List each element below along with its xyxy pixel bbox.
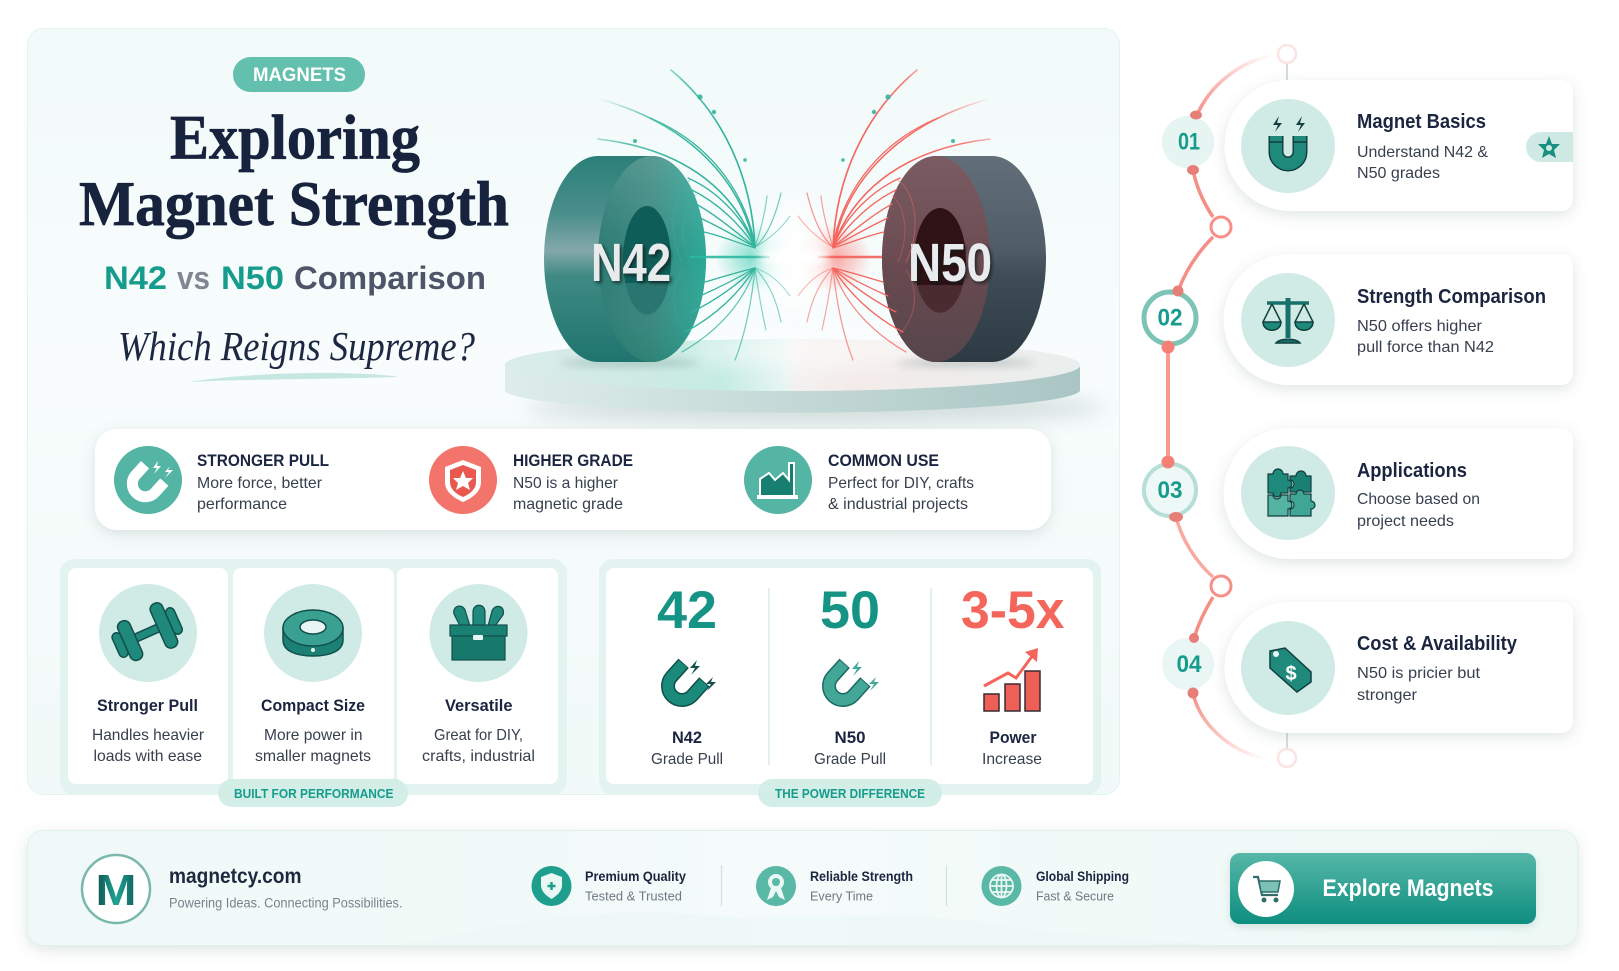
feature: stronger pull: More force, better xyxy=(197,475,323,492)
feature: higher grade: magnetic grade xyxy=(513,496,623,513)
feature: stronger pull: STRONGER PULL xyxy=(197,452,329,470)
badge: built for performance xyxy=(218,779,408,807)
card: versatile: Versatile xyxy=(445,696,512,715)
step card: Magnet Basics xyxy=(1224,80,1573,211)
card: versatile: Great for DIY, xyxy=(434,727,523,744)
magnetic field lines: teal xyxy=(592,70,790,360)
card: stronger pull: Handles heavier xyxy=(92,727,205,744)
icon: dumbbell xyxy=(106,597,188,669)
step card: Strength Comparison: pull force than N42 xyxy=(1357,339,1494,356)
timeline marker 01: 01 xyxy=(1178,128,1200,156)
footer bar xyxy=(28,830,1578,946)
badge: the power difference xyxy=(758,779,942,807)
stat: N50: Grade Pull xyxy=(814,751,886,768)
star tab xyxy=(1526,132,1573,162)
step card: Magnet Basics: N50 grades xyxy=(1357,165,1440,182)
logo: M xyxy=(96,866,136,915)
stat: N50: 50 xyxy=(820,581,880,640)
stat: N50: N50 xyxy=(834,728,866,747)
stat: N42: 42 xyxy=(657,581,717,640)
step card: Cost & Availability xyxy=(1224,602,1573,733)
step card: Strength Comparison: N50 offers higher xyxy=(1357,318,1483,335)
icon: puzzle pieces xyxy=(1268,469,1315,516)
step card: Applications xyxy=(1224,428,1573,559)
feature bar xyxy=(95,429,1051,530)
magnetic field lines: red xyxy=(798,70,996,360)
timeline marker 03 xyxy=(1144,456,1196,522)
feature: higher grade: HIGHER GRADE xyxy=(513,452,633,470)
card: compact size: smaller magnets xyxy=(255,748,371,765)
icon: balance scale xyxy=(1263,298,1313,343)
icon: horseshoe magnet xyxy=(1269,116,1307,164)
brand text: magnetcy.com xyxy=(169,865,302,888)
timeline marker 02: 02 xyxy=(1158,304,1182,332)
step card: Applications: Choose based on xyxy=(1357,491,1480,508)
subtitle: N42 vs N50 Comparison: Comparison xyxy=(294,260,486,296)
panel: main hero panel xyxy=(28,28,1120,807)
trust badge: premium quality: Tested & Trusted xyxy=(585,888,682,904)
magnet N50 xyxy=(882,156,1046,367)
subtitle: N42 vs N50 Comparison: N50 xyxy=(221,260,284,296)
feature: common use: & industrial projects xyxy=(828,496,968,513)
trust badge: premium quality: Premium Quality xyxy=(585,869,686,884)
trust badge: global shipping xyxy=(982,866,1129,906)
timeline marker 04: 04 xyxy=(1176,651,1202,678)
badge: built for performance: BUILT FOR PERFORMANCE xyxy=(234,786,394,801)
step card: Strength Comparison: Strength Comparison xyxy=(1357,286,1546,308)
icon: ring magnet xyxy=(283,610,343,656)
stat: N50 xyxy=(814,581,886,768)
subtitle: N42 vs N50 Comparison: vs xyxy=(177,260,210,296)
card: stronger pull: loads with ease xyxy=(94,748,202,765)
panel: built for performance xyxy=(60,559,567,807)
stat: N42 xyxy=(651,581,723,768)
feature: stronger pull xyxy=(114,446,329,514)
magnet N42: N42 xyxy=(591,233,671,293)
trust badge: reliable strength xyxy=(722,865,946,906)
button: Explore Magnets: Explore Magnets xyxy=(1322,875,1494,902)
step card: Cost & Availability: stronger xyxy=(1357,687,1418,704)
step card: Magnet Basics: Understand N42 & xyxy=(1357,144,1488,161)
step card: Applications: project needs xyxy=(1357,513,1454,530)
stat: 3-5x: 3-5x xyxy=(961,581,1065,640)
feature: higher grade: N50 is a higher xyxy=(513,475,619,492)
title xyxy=(79,102,509,239)
trust badge: reliable strength: Every Time xyxy=(810,888,873,904)
title: Exploring xyxy=(170,102,420,172)
feature: common use: COMMON USE xyxy=(828,452,939,470)
hero illustration: magnets on platform xyxy=(504,70,1105,422)
feature: common use xyxy=(744,446,974,514)
trust badge: premium quality xyxy=(532,866,686,906)
trust badge: global shipping: Global Shipping xyxy=(1036,869,1129,884)
badge: MAGNETS: MAGNETS xyxy=(253,65,346,86)
stat: 3-5x: Increase xyxy=(982,751,1042,768)
badge: MAGNETS xyxy=(233,57,365,92)
step card: Strength Comparison xyxy=(1224,254,1573,385)
card: versatile: crafts, industrial xyxy=(422,748,535,765)
trust badge: reliable strength: Reliable Strength xyxy=(810,869,913,884)
icon: shopping cart xyxy=(1253,877,1280,902)
subtitle: N42 vs N50 Comparison xyxy=(104,260,486,296)
icon: N50 magnet xyxy=(823,661,879,706)
step card: Applications: Applications xyxy=(1357,460,1467,482)
step card: Magnet Basics: Magnet Basics xyxy=(1357,111,1486,133)
magnet N50: N50 xyxy=(908,233,992,293)
stat: 3-5x xyxy=(961,581,1065,768)
icon: price tag xyxy=(1270,648,1311,692)
icon: N42 magnet xyxy=(662,660,716,706)
card: versatile xyxy=(397,568,558,784)
subtitle: N42 vs N50 Comparison: N42 xyxy=(104,260,167,296)
feature: higher grade xyxy=(429,446,633,514)
logo xyxy=(82,855,150,923)
step card: Cost & Availability: N50 is pricier but xyxy=(1357,665,1481,682)
brand text xyxy=(169,865,402,910)
timeline marker 03: 03 xyxy=(1158,477,1182,504)
brand text: Powering Ideas. Connecting Possibilities. xyxy=(169,896,402,910)
card: compact size: More power in xyxy=(264,727,362,744)
card: stronger pull xyxy=(68,568,228,784)
timeline marker 04 xyxy=(1162,633,1214,698)
timeline marker 01 xyxy=(1162,110,1214,175)
badge: the power difference: THE POWER DIFFERENCE xyxy=(775,786,925,801)
timeline marker 02 xyxy=(1144,286,1196,354)
title: Magnet Strength xyxy=(79,168,509,239)
feature: common use: Perfect for DIY, crafts xyxy=(828,475,974,492)
card: compact size: Compact Size xyxy=(261,696,365,715)
stat: N42: Grade Pull xyxy=(651,751,723,768)
step card: Cost & Availability: Cost & Availability xyxy=(1357,633,1518,655)
timeline path xyxy=(1168,45,1296,767)
feature: stronger pull: performance xyxy=(197,496,287,513)
panel: the power difference xyxy=(599,559,1101,807)
button: Explore Magnets xyxy=(1230,853,1536,924)
stat: N42: N42 xyxy=(672,728,702,747)
glow: centre field xyxy=(715,188,872,328)
trust badge: global shipping: Fast & Secure xyxy=(1036,888,1114,904)
card: compact size xyxy=(233,568,394,784)
icon: price tag: $ xyxy=(1285,663,1297,685)
stat: 3-5x: Power xyxy=(990,728,1037,747)
icon: rising bar chart xyxy=(984,648,1040,711)
platform xyxy=(504,339,1080,413)
magnet N42 xyxy=(544,156,706,367)
icon: toolbox xyxy=(450,605,507,660)
card: stronger pull: Stronger Pull xyxy=(97,696,198,715)
tagline with swoosh: Which Reigns Supreme? xyxy=(118,323,475,369)
